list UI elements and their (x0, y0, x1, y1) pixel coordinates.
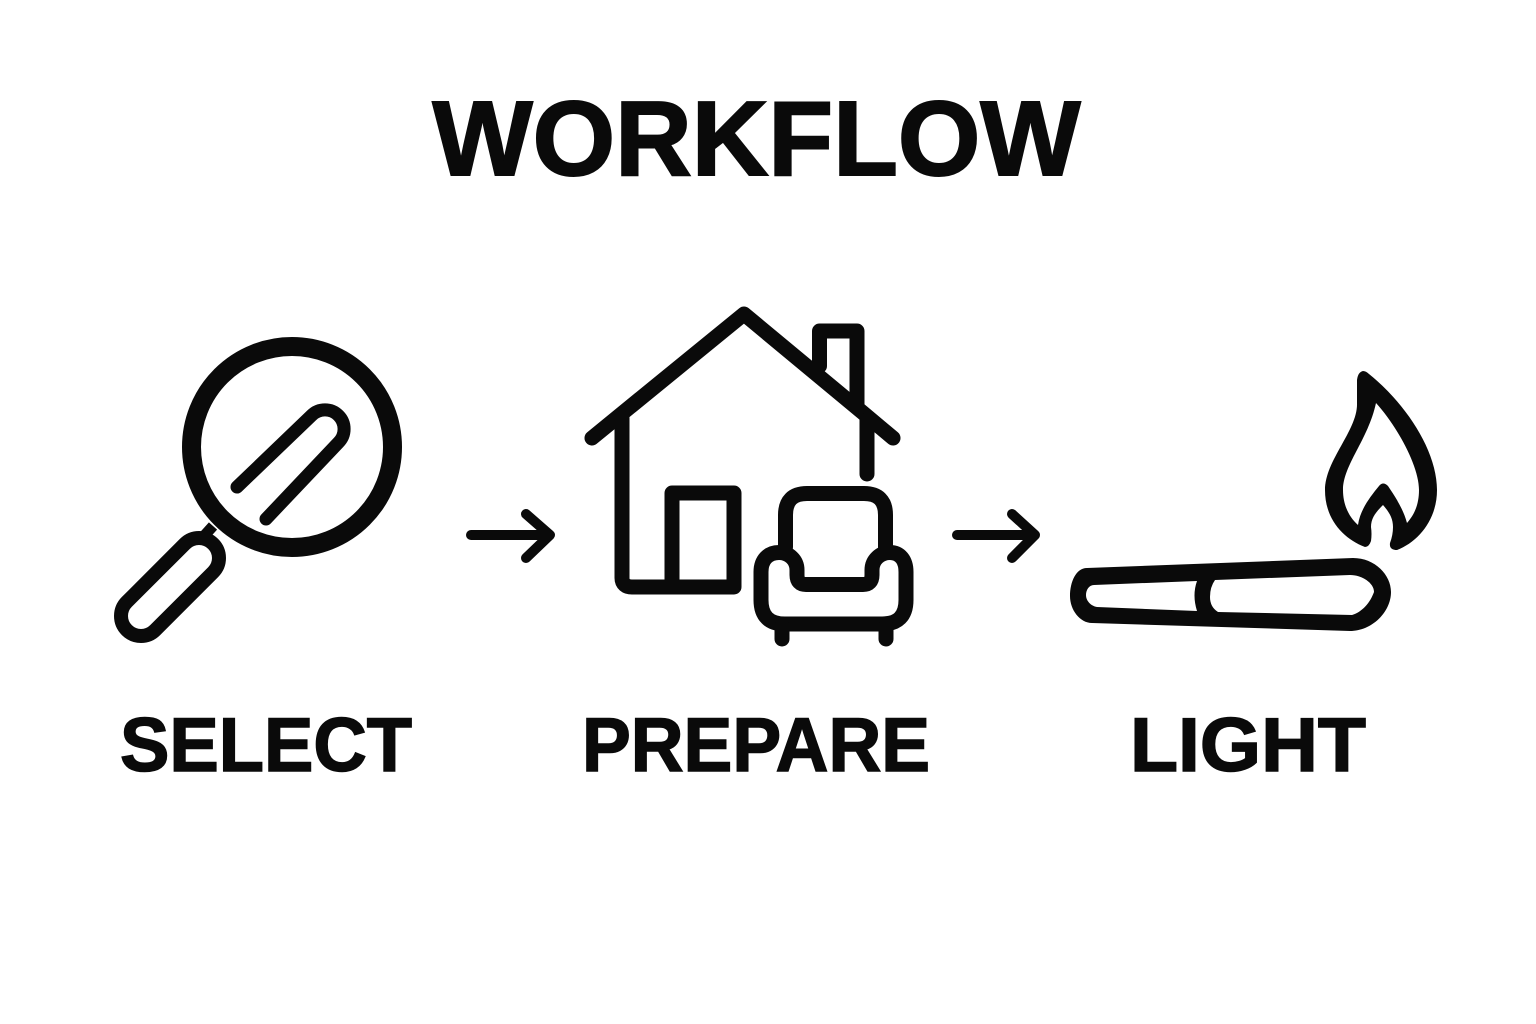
icon: magnifying glass (113, 346, 392, 644)
label: select: SELECT (120, 703, 412, 788)
label: prepare: PREPARE (582, 703, 930, 788)
label: light: LIGHT (1130, 703, 1366, 788)
icon: lit match (1070, 371, 1437, 631)
icon: house with armchair (592, 314, 906, 639)
arrow: select to prepare (471, 514, 550, 558)
arrow: prepare to light (957, 514, 1035, 558)
title: WORKFLOW (432, 80, 1080, 198)
